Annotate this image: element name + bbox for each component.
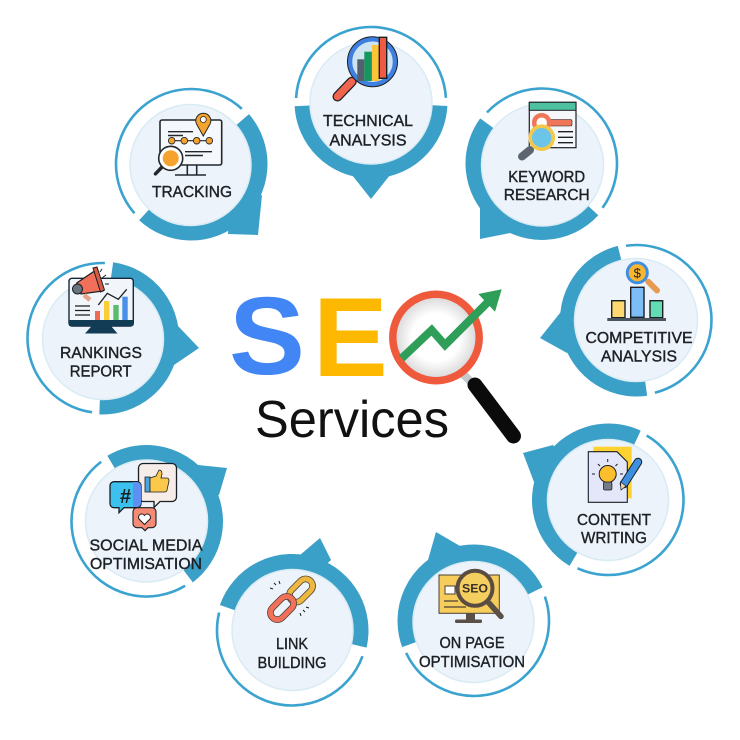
badge: social media optimisation <box>44 419 249 624</box>
badge: rankings report <box>18 253 199 423</box>
icon: monitor with location pin <box>156 113 222 175</box>
label: content writing: WRITING <box>581 530 647 547</box>
badge: on page optimisation <box>379 526 569 716</box>
label: keyword research: KEYWORD <box>508 169 585 186</box>
icon: document with bulb and pencil <box>588 447 638 502</box>
label: link building: LINK <box>276 636 308 653</box>
icon: social bubbles: # <box>120 486 131 508</box>
icon: key and browser window <box>522 102 576 156</box>
icon: bar chart with dollar magnifier: $ <box>634 266 642 280</box>
badge: technical analysis <box>292 23 450 199</box>
icon: magnifier with bar chart <box>338 37 398 96</box>
growth arrow <box>402 289 502 358</box>
icon: monitor with SEO magnifier: SEO <box>462 584 488 596</box>
magnifying glass <box>393 294 514 436</box>
icon: monitor with SEO magnifier <box>439 571 501 623</box>
word: services: Services <box>255 391 449 449</box>
label: keyword research: RESEARCH <box>504 187 590 204</box>
badge: content writing <box>506 397 711 603</box>
badge: link building <box>196 534 388 727</box>
label: competitive analysis: ANALYSIS <box>601 348 677 366</box>
letter E: E <box>313 275 388 400</box>
label: on page optimisation: ON PAGE <box>440 635 504 652</box>
badge: tracking <box>85 58 297 270</box>
letter S: S <box>229 275 305 398</box>
label: link building: BUILDING <box>258 655 326 672</box>
central logo: SEO services <box>229 275 514 449</box>
icon: bar chart with dollar magnifier <box>607 263 666 321</box>
icon: monitor with megaphone and chart <box>69 267 133 334</box>
icon: social bubbles <box>110 464 176 531</box>
label: social media optimisation: OPTIMISATION <box>90 556 202 573</box>
label: competitive analysis: COMPETITIVE <box>586 330 692 347</box>
label: social media optimisation: SOCIAL MEDIA <box>90 538 203 555</box>
label: technical analysis: TECHNICAL <box>323 113 413 130</box>
badge: keyword research <box>436 58 648 269</box>
label: rankings report: REPORT <box>70 364 132 381</box>
label: rankings report: RANKINGS <box>60 345 142 362</box>
label: content writing: CONTENT <box>577 512 651 529</box>
label: tracking: TRACKING <box>152 184 232 201</box>
badge: competitive analysis <box>540 235 721 405</box>
label: on page optimisation: OPTIMISATION <box>419 654 525 671</box>
label: technical analysis: ANALYSIS <box>330 132 406 150</box>
icon: chain links <box>268 576 315 622</box>
